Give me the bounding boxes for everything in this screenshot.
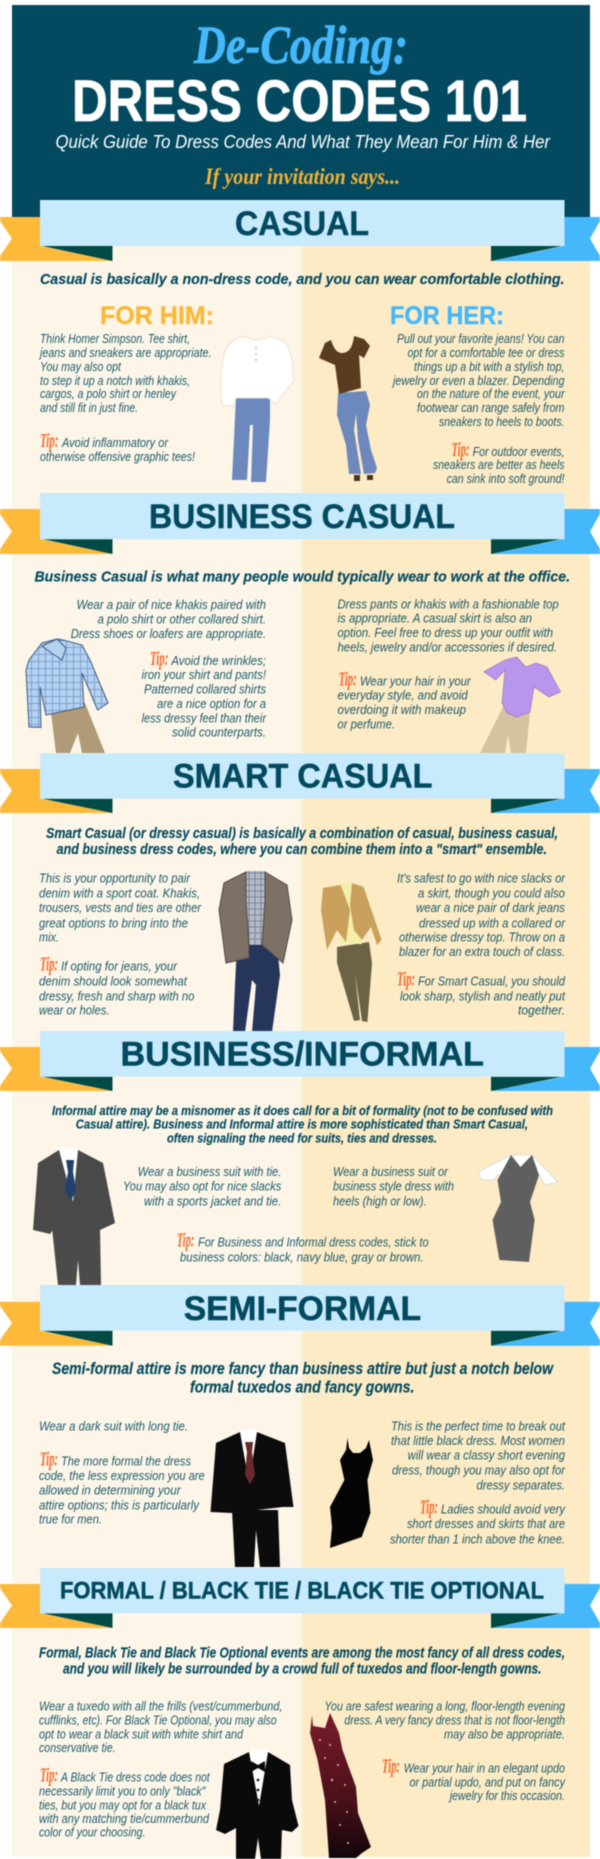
text block: casual for her: things up a bit with a stylish top, [414,360,564,374]
text block: formal for him: cufflinks, etc). For Black Tie Optional, you may also [39,1714,277,1728]
illustration: tan blazer and olive pants [321,883,382,1022]
text block: business/informal for him: You may also opt for nice slacks [123,1180,281,1194]
text block: smart casual for him [39,872,202,1018]
illustration: little black dress [330,1438,373,1548]
text block: casual for her: Pull out your favorite jeans! You can [397,332,565,346]
illustration: black suit with maroon tie [210,1430,294,1567]
text block: casual for him: You may also opt [40,360,121,374]
tip: business/informal: For Business and Informal dress codes, stick to [198,1236,429,1250]
text block: smart casual for her [397,872,566,1018]
header panel [12,5,590,246]
text block: business casual for him: Patterned collared shirts [144,682,266,696]
text block: formal for him: A Black Tie dress code does not [60,1771,210,1785]
text block: business/informal for him: with a sports jacket and tie. [144,1194,281,1208]
banner: formal [0,1568,600,1628]
text block: semi-formal for him [39,1419,205,1527]
lead-in line: If your invitation says... [204,164,400,189]
text block: formal for her: jewelry for this occasion. [448,1789,565,1803]
text block: formal for him: Tip: [40,1765,58,1787]
text block: smart casual for her: together. [518,1004,565,1018]
text block: casual for him: Avoid inflammatory or [61,436,169,450]
text block: formal for her: You are safest wearing a long, floor-length evening [324,1700,565,1714]
text block: semi-formal for him: The more formal the dress [61,1454,191,1468]
intro text: formal [39,1644,565,1677]
text block: semi-formal for her: Tip: [420,1496,438,1518]
text block: semi-formal for her: short dresses and skirts that are [407,1517,565,1531]
section: business casual [0,493,600,753]
background panel: left cream column [12,240,302,1857]
text block: casual for her: jewelry or even a blazer. Depending [391,374,565,388]
text block: business casual for him: Dress shoes or loafers are appropriate. [71,627,266,641]
text block: casual for her: footwear can range safely from [417,401,564,415]
banner: business/informal: BUSINESS/INFORMAL [120,1036,484,1074]
section: semi-formal [0,1285,600,1567]
text block: business casual for him [71,598,267,740]
section: formal [0,1568,600,1859]
text block: casual for him: otherwise offensive graphic tees! [40,450,195,464]
text block: business casual for him: Tip: [150,648,168,670]
text block: semi-formal for her: Ladies should avoid very [441,1502,566,1516]
illustration: brown tee and jeans [319,336,377,481]
intro text: business/informal: often signaling the need for suits, ties and dresses. [167,1131,437,1146]
text block: casual for him: Think Homer Simpson. Tee shirt, [40,332,190,346]
text block: smart casual for him: great options to bring into the [39,916,188,930]
text block: casual for her: For outdoor events, [473,445,564,459]
text block: casual for him: to step it up a notch with khakis, [40,374,190,388]
background panel: right tan column [302,240,590,1857]
text block: semi-formal for her [390,1419,566,1546]
text block: business casual for her: heels, jewelry and/or accessories if desired. [338,640,557,654]
text block: semi-formal for him: true for men. [39,1513,102,1527]
text block: formal for her: Wear your hair in an elegant updo [404,1761,565,1775]
text block: business casual for her: Dress pants or khakis with a fashionable top [338,597,559,611]
title: Dress Codes 101: DRESS CODES 101 [72,69,527,134]
banner: business casual: BUSINESS CASUAL [149,498,455,536]
text block: formal for her: Tip: [382,1755,400,1777]
text block: formal for him: ties, but you may opt for a black tux [39,1798,207,1812]
text block: smart casual for him: mix. [39,931,59,945]
text block: business/informal for him [123,1165,281,1208]
text block: smart casual for him: If opting for jeans, your [61,960,178,974]
text block: business casual for her: Wear your hair in your [360,674,471,688]
text block: business casual for him: solid counterparts. [172,726,266,740]
illustration: business suit with tie [33,1148,115,1285]
banner: casual [0,200,600,261]
text block: semi-formal for him: Tip: [40,1448,58,1470]
text block: formal for him: with any matching tie/cummerbund [39,1812,210,1826]
text block: business casual for her: overdoing it with makeup [338,703,466,717]
illustration: black tuxedo with bow tie [216,1750,298,1859]
banner: business/informal [0,1031,600,1091]
text block: smart casual for him: denim should look somewhat [39,974,187,988]
section: business/informal [0,1031,600,1285]
text block: formal for him: opt to wear a black suit with white shirt and [39,1727,244,1741]
subtitle: Quick Guide To Dress Codes And What They Mean For Him & Her [56,132,551,152]
text block: casual for her: sneakers to heels to boots. [439,415,564,429]
text block: casual for him: Tip: [40,430,58,452]
text block: formal for him [39,1700,282,1840]
banner: semi-formal: SEMI-FORMAL [184,1290,421,1328]
illustration: sequined maroon gown [310,1713,371,1858]
text block: semi-formal for her: This is the perfect time to break out [391,1419,565,1433]
text block: casual for her [391,332,565,486]
text block: formal for him: color of your choosing. [39,1826,145,1840]
text block: business casual for her [338,597,559,732]
text block: casual for her: on the nature of the event, your [417,387,565,401]
text block: smart casual for him: wear or holes. [39,1004,110,1018]
banner: semi-formal [0,1285,600,1346]
tip: business/informal: Tip: [177,1230,194,1252]
text block: smart casual for him: This is your opportunity to pair [39,872,191,886]
illustration: lavender blouse and khakis [480,657,561,753]
text block: business casual for him: Avoid the wrinkles; [170,654,266,668]
text block: semi-formal for her: shorter than 1 inch above the knee. [390,1532,565,1546]
text block: business casual for him: Wear a pair of nice khakis paired with [76,598,266,612]
text block: business casual for her: everyday style, and avoid [338,689,469,703]
intro text: casual: Casual is basically a non-dress code, and you can wear comfortable clothing. [40,271,564,288]
illustration: grey business dress with white sleeves [478,1155,558,1262]
text block: smart casual for her: It's safest to go with nice slacks or [397,872,566,886]
text block: semi-formal for her: that little black dress. Most women [391,1434,565,1448]
text block: semi-formal for her: dress, though you may also opt for [392,1464,566,1478]
text block: business/informal for her: Wear a business suit or [333,1165,449,1179]
text block: business/informal for her: business style dress with [333,1180,454,1194]
illustration: plaid shirt and khakis [26,639,108,753]
intro text: business casual: Business Casual is what many people would typically wear to work at the office. [34,569,570,586]
tip: business/informal [177,1230,429,1264]
intro text: smart casual [46,825,558,858]
text block: business casual for her: or perfume. [338,718,395,732]
text block: smart casual for him: denim with a sport coat. Khakis, [39,886,200,900]
section: smart casual [0,753,600,1032]
text block: semi-formal for her: will wear a classy short evening [408,1449,565,1463]
text block: business casual for her: option. Feel free to dress up your outfit with [338,626,553,640]
text block: formal for her: or partial updo, and put on fancy [410,1775,566,1789]
intro text: business/informal: Casual attire). Business and Informal attire is more sophisticated than Smart Casual, [76,1117,528,1132]
banner: smart casual: SMART CASUAL [173,758,432,796]
heading: for him: FOR HIM: [100,302,214,330]
intro text: business/informal [52,1103,553,1146]
text block: semi-formal for him: allowed in determining your [39,1484,181,1498]
illustration: white henley and jeans [221,336,294,482]
text block: casual for him [38,332,211,464]
text block: formal for him: necessarily limit you to only "black" [39,1784,206,1798]
title: De-Coding: De-Coding: [193,15,408,75]
intro text: semi-formal: formal tuxedos and fancy gowns. [190,1378,414,1397]
banner: smart casual [0,753,600,813]
text block: business casual for her: is appropriate. A casual skirt is also an [338,612,532,626]
text block: semi-formal for her: dressy separates. [476,1478,565,1492]
text block: formal for her: dress. A very fancy dress that is not floor-length [344,1714,565,1728]
text block: casual for her: Tip: [452,439,470,461]
banner: formal: FORMAL / BLACK TIE / BLACK TIE OPTIONAL [60,1577,544,1604]
text block: formal for her [324,1700,566,1803]
text block: smart casual for her: wear a nice pair of dark jeans [416,901,565,915]
tip: business/informal: business colors: black, navy blue, gray or brown. [180,1250,424,1264]
illustration: sport coat and dark jeans [219,871,292,1032]
text block: business casual for him: a polo shirt or other collared shirt. [98,612,266,626]
text block: smart casual for her: blazer for an extra touch of class. [399,945,565,959]
text block: business/informal for her: heels (high or low). [333,1194,427,1208]
text block: smart casual for her: otherwise dressy top. Throw on a [399,931,565,945]
text block: smart casual for her: look sharp, stylish and neatly put [400,989,565,1003]
text block: formal for him: conservative tie. [39,1741,116,1755]
text block: business/informal for her [333,1165,454,1208]
intro text: semi-formal [52,1359,554,1397]
text block: business casual for him: iron your shirt and pants! [142,668,266,682]
text block: semi-formal for him: attire options; this is particularly [39,1498,200,1512]
heading: for her: FOR HER: [390,302,504,330]
text block: smart casual for her: Tip: [397,968,415,990]
text block: smart casual for him: trousers, vests and ties are other [39,901,202,915]
text block: casual for her: sneakers are better as heels [433,458,564,472]
text block: formal for her: may also be appropriate. [444,1727,565,1741]
text block: casual for him: cargos, a polo shirt or henley [40,387,177,401]
text block: casual for her: opt for a comfortable tee or dress [408,346,564,360]
text block: business casual for him: are a nice option for a [157,697,266,711]
text block: business casual for her: Tip: [339,668,357,690]
text block: semi-formal for him: Wear a dark suit with long tie. [39,1419,188,1433]
text block: formal for him: Wear a tuxedo with all the frills (vest/cummerbund, [39,1700,282,1714]
banner: casual: CASUAL [235,205,369,243]
text block: smart casual for her: a skirt, though you could also [418,886,565,900]
text block: smart casual for her: dressed up with a collared or [419,916,566,930]
text block: casual for him: jeans and sneakers are appropriate. [38,346,211,360]
banner: business casual [0,493,600,554]
section: casual [0,200,600,486]
text block: smart casual for him: Tip: [40,954,58,976]
text block: casual for her: can sink into soft ground! [447,472,565,486]
text block: smart casual for her: For Smart Casual, you should [418,974,566,988]
text block: semi-formal for him: code, the less expression you are [39,1469,205,1483]
text block: business casual for him: less dressy feel than their [142,711,267,725]
text block: business/informal for him: Wear a business suit with tie. [138,1165,281,1179]
text block: smart casual for him: dressy, fresh and sharp with no [39,989,194,1003]
text block: casual for him: and still fit in just fine. [40,401,138,415]
